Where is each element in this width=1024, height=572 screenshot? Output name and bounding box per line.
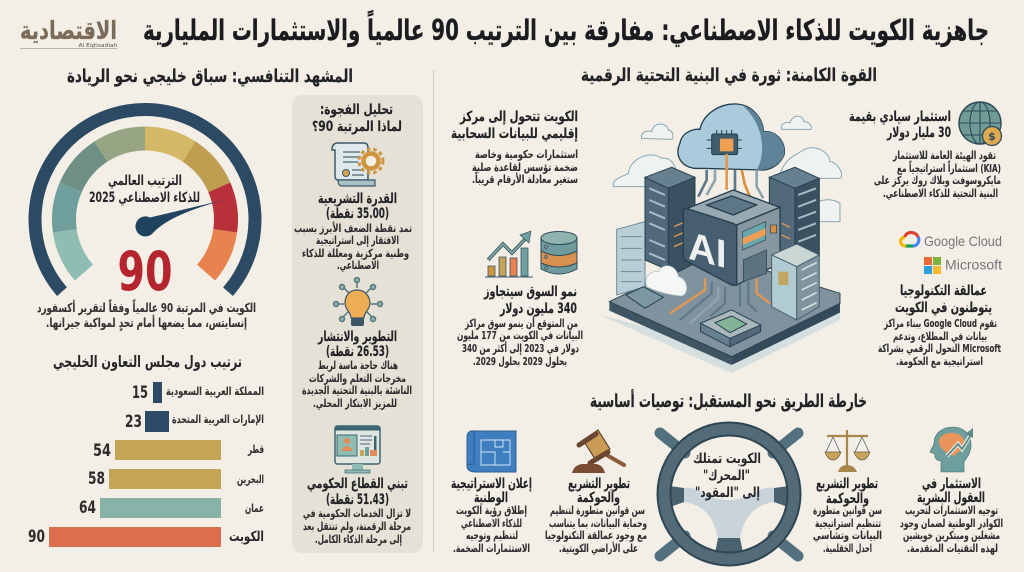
block: legislation left	[545, 476, 647, 555]
bar: UAE	[125, 411, 264, 432]
block: sovereign investment: استثمار سيادي بقيمة	[849, 109, 951, 126]
block: legislation right	[813, 476, 882, 555]
block: development and diffusion: (26.53 نقطة)	[326, 344, 389, 360]
block: national strategy: للذكاء الاصطناعي	[461, 517, 522, 530]
logo: Google Cloud: Google Cloud	[924, 233, 1002, 249]
block: tech giants: عمالقة التكنولوجيا	[900, 283, 987, 299]
bar: Saudi Arabia: المملكة العربية السعودية	[166, 384, 264, 399]
icon: blueprint	[467, 431, 516, 472]
cable bundle	[698, 154, 763, 198]
gauge label: الترتيب العالمي	[108, 173, 182, 189]
block: market growth: نمو السوق سيتجاوز	[483, 284, 577, 300]
block: regional cloud hub: ستغير معادلة الأرقام قريباً.	[472, 171, 578, 186]
heading: competitive scene: المشهد التنافسي: سباق خليجي نحو الريادة	[67, 66, 353, 87]
block: legislative capacity	[294, 191, 412, 272]
block: legislation right: والحوكمة	[826, 491, 869, 507]
bottom chip	[701, 310, 761, 347]
bar: Qatar	[93, 440, 264, 460]
block: development and diffusion: التطوير والانتشار	[317, 329, 397, 345]
block: tech giants	[878, 283, 1001, 368]
block: legislation right: سن قوانين متطورة	[813, 504, 882, 517]
icon: brain and head	[930, 427, 973, 472]
left module	[626, 287, 663, 308]
right server tower	[769, 167, 819, 263]
block: legislation left: مع وجود عمالقة التكنولوجيا	[545, 529, 647, 542]
block: legislation left: تطوير التشريع	[568, 476, 630, 492]
base plate	[600, 253, 840, 373]
block: development and diffusion: للمزيز الابتكار المحلي.	[313, 397, 397, 410]
gauge value 90: 90	[118, 240, 172, 303]
gauge label: للذكاء الاصطناعي 2025	[89, 190, 200, 206]
cloud chip	[707, 130, 742, 155]
pale left server	[617, 222, 645, 295]
block: government adoption: لا تزال الخدمات الحكومية في	[303, 507, 411, 520]
heading: roadmap: خارطة الطريق نحو المستقبل: توصيات أساسية	[590, 389, 867, 412]
block: market growth: من المتوقع أن ينمو سوق مراكز	[464, 316, 578, 330]
block: legislative capacity: القدرة التشريعية	[318, 191, 397, 207]
block: market growth: دولار في 2023 إلى أكثر من 340	[462, 341, 579, 355]
block: development and diffusion: هناك حاجة ماسة لربط	[318, 359, 398, 372]
icon: steering wheel	[660, 429, 798, 559]
gauge label	[89, 173, 200, 206]
block: legislation left: وحماية البيانات، بما يتناسب	[549, 517, 647, 530]
gauge caption	[37, 298, 256, 331]
gauge caption: إنسايتس، مما يضعها أمام تحدٍ لمواكبة جيرانها.	[46, 314, 247, 331]
block: regional cloud hub: ضخمة تؤسس لقاعدة صلبة	[472, 161, 578, 174]
bar: Oman: 64	[79, 498, 96, 517]
block: sovereign investment: (KIA) استثماراً استراتيجياً مع	[897, 160, 1001, 175]
icon: scroll and gear	[332, 143, 383, 186]
bar: UAE: الإمارات العربية المتحدة	[172, 412, 264, 426]
bar: Oman	[79, 498, 264, 518]
wheel text: ‏"المحرك"‏	[703, 468, 750, 484]
left server tower	[645, 167, 695, 277]
block: government adoption: تبني القطاع الحكومي	[307, 476, 408, 492]
bar: UAE: 23	[125, 412, 142, 431]
block: regional cloud hub: إقليمي للبيانات السحابية	[451, 126, 578, 142]
logo: Microsoft	[924, 256, 1002, 274]
GCC ranking bar chart	[28, 353, 264, 547]
bar: Saudi Arabia	[132, 382, 264, 403]
block: legislative capacity: الاصطناعي.	[337, 259, 379, 272]
gauge outer arc	[35, 110, 255, 292]
bar: Bahrain: 58	[88, 469, 105, 488]
block: government adoption	[303, 476, 411, 546]
icon: database	[541, 232, 577, 274]
small server right	[772, 244, 819, 320]
block: tech giants: Microsoft التحول الرقمي بشراكة	[878, 342, 1001, 355]
bar: Bahrain	[88, 469, 264, 489]
block: government adoption: (51.43 نقطة)	[326, 492, 389, 508]
wheel text: الكويت تمتلك	[693, 451, 761, 467]
logo: Al Eqtisadiah: الاقتصادية	[20, 16, 117, 45]
block: regional cloud hub	[451, 109, 578, 186]
block: market growth: البيانات في الكويت من 177 مليون	[457, 329, 583, 342]
bar: Bahrain: البحرين	[237, 472, 264, 486]
bottom cables	[670, 278, 770, 323]
gauge needle	[135, 199, 228, 236]
icon: growth chart	[485, 231, 533, 277]
AI lettering: AI	[688, 224, 726, 277]
panel heading: لماذا المرتبة 90؟	[312, 119, 402, 135]
logo: Google Cloud	[901, 232, 1002, 249]
wheel text	[693, 451, 761, 501]
block: sovereign investment: 30 مليار دولار	[886, 125, 951, 141]
heading: hidden strength: القوة الكامنة: ثورة في البنية التحتية الرقمية	[581, 65, 877, 86]
block: legislation left: سن قوانين متطورة لتنظيم	[550, 504, 645, 517]
block: market growth	[457, 284, 583, 368]
block: tech giants: استراتيجية مع الحكومة.	[896, 355, 983, 368]
cloud highlight	[743, 107, 784, 170]
bar: Qatar: 54	[93, 441, 111, 460]
block: government adoption: مرحلة الرقمنة، ولم تنتقل بعد	[303, 520, 411, 533]
bar: Qatar: قطر	[247, 442, 264, 456]
icon: light bulb	[334, 278, 382, 326]
wheel text: ‏إلى "المقود"‏	[695, 485, 760, 501]
bar: Saudi Arabia: 15	[132, 383, 148, 402]
block: market growth: 340 مليون دولار	[499, 301, 577, 317]
icon: monitor	[335, 426, 380, 473]
block: development and diffusion	[302, 329, 412, 410]
small white cloud	[646, 266, 687, 296]
illustration: AI data centre	[600, 104, 842, 373]
block: legislation left: على الأراضي الكويتية.	[559, 541, 638, 555]
block: government adoption: إلى مرحلة الذكاء الكامل.	[315, 533, 402, 546]
block: regional cloud hub: استثمارات حكومية وخاصة	[475, 148, 578, 161]
gauge caption: الكويت في المرتبة 90 عالمياً وفقاً لتقرير أكسفورد	[37, 298, 256, 315]
bar: Kuwait: 90	[28, 527, 45, 546]
block: market growth: بحلول 2029 بحلول 2029.	[473, 355, 567, 368]
bar: Kuwait	[28, 527, 264, 547]
block: sovereign investment	[849, 109, 1001, 200]
icon: globe with dollar coin: $	[988, 130, 996, 143]
bar: Oman: عمان	[245, 501, 264, 515]
main cloud	[678, 104, 784, 170]
block: national strategy	[451, 476, 532, 555]
block: human capital: العقول البشرية	[917, 490, 985, 506]
bar: Kuwait: الكويت	[229, 529, 264, 545]
gauge chart	[35, 110, 255, 303]
block: development and diffusion: مخرجات التعلم والشركات	[309, 372, 406, 385]
wheel spokes	[662, 485, 796, 553]
wheel handles	[660, 433, 798, 556]
panel heading: تحليل الفجوة:	[320, 102, 393, 118]
block: national strategy: إطلاق رؤية الكويت	[456, 504, 527, 517]
panel heading	[312, 102, 402, 135]
logo: Microsoft: Microsoft	[945, 256, 1002, 272]
icon: scales	[825, 430, 870, 472]
block: legislative capacity: الافتقار إلى استراتيجية	[316, 234, 399, 247]
central AI cube	[683, 190, 780, 285]
gauge colored segments	[64, 138, 226, 273]
block: legislation right: احدل الخقلمية.	[823, 542, 872, 555]
block: tech giants: تقوم Google Cloud ببناء مراكز	[883, 317, 997, 330]
cube display	[743, 222, 777, 282]
block: legislation right: تطوير التشريع	[816, 476, 878, 492]
block: development and diffusion: الناشئة بالبنية التحتية الجديدة	[302, 384, 412, 397]
block: national strategy: الاستثمارات الضخمة.	[453, 542, 530, 555]
chart title: ترتيب دول مجلس التعاون الخليجي	[53, 353, 242, 372]
block: legislative capacity: وطنية مركزية ومعللة للذكاء	[302, 247, 409, 260]
panel: gap analysis	[292, 95, 423, 553]
block: human capital	[900, 476, 1003, 555]
block: legislation right: البيانات وتشاسي	[813, 529, 882, 542]
wheel ring	[664, 429, 794, 559]
background clouds	[613, 116, 842, 222]
block: regional cloud hub: الكويت تتحول إلى مركز	[459, 109, 578, 125]
block: national strategy: إعلان الاستراتيجية	[451, 476, 532, 492]
block: human capital: الاستثمار في	[922, 476, 981, 492]
block: national strategy: لتنظيم وتوجيه	[466, 529, 518, 542]
logo: Al Eqtisadiah: Al Eqtisadiah	[78, 43, 118, 49]
block: legislation right: تتنظيم استراتيجية	[815, 517, 881, 530]
block: legislative capacity: تمد نقطة الضعف الأبرز بسبب	[294, 221, 412, 235]
icon: gavel	[572, 430, 624, 473]
block: legislative capacity: (35.00 نقطة)	[326, 206, 389, 222]
block: legislation left: والحوكمة	[577, 490, 620, 506]
icon: globe with dollar coin	[959, 102, 1002, 146]
block: national strategy: الوطنية	[474, 490, 508, 506]
